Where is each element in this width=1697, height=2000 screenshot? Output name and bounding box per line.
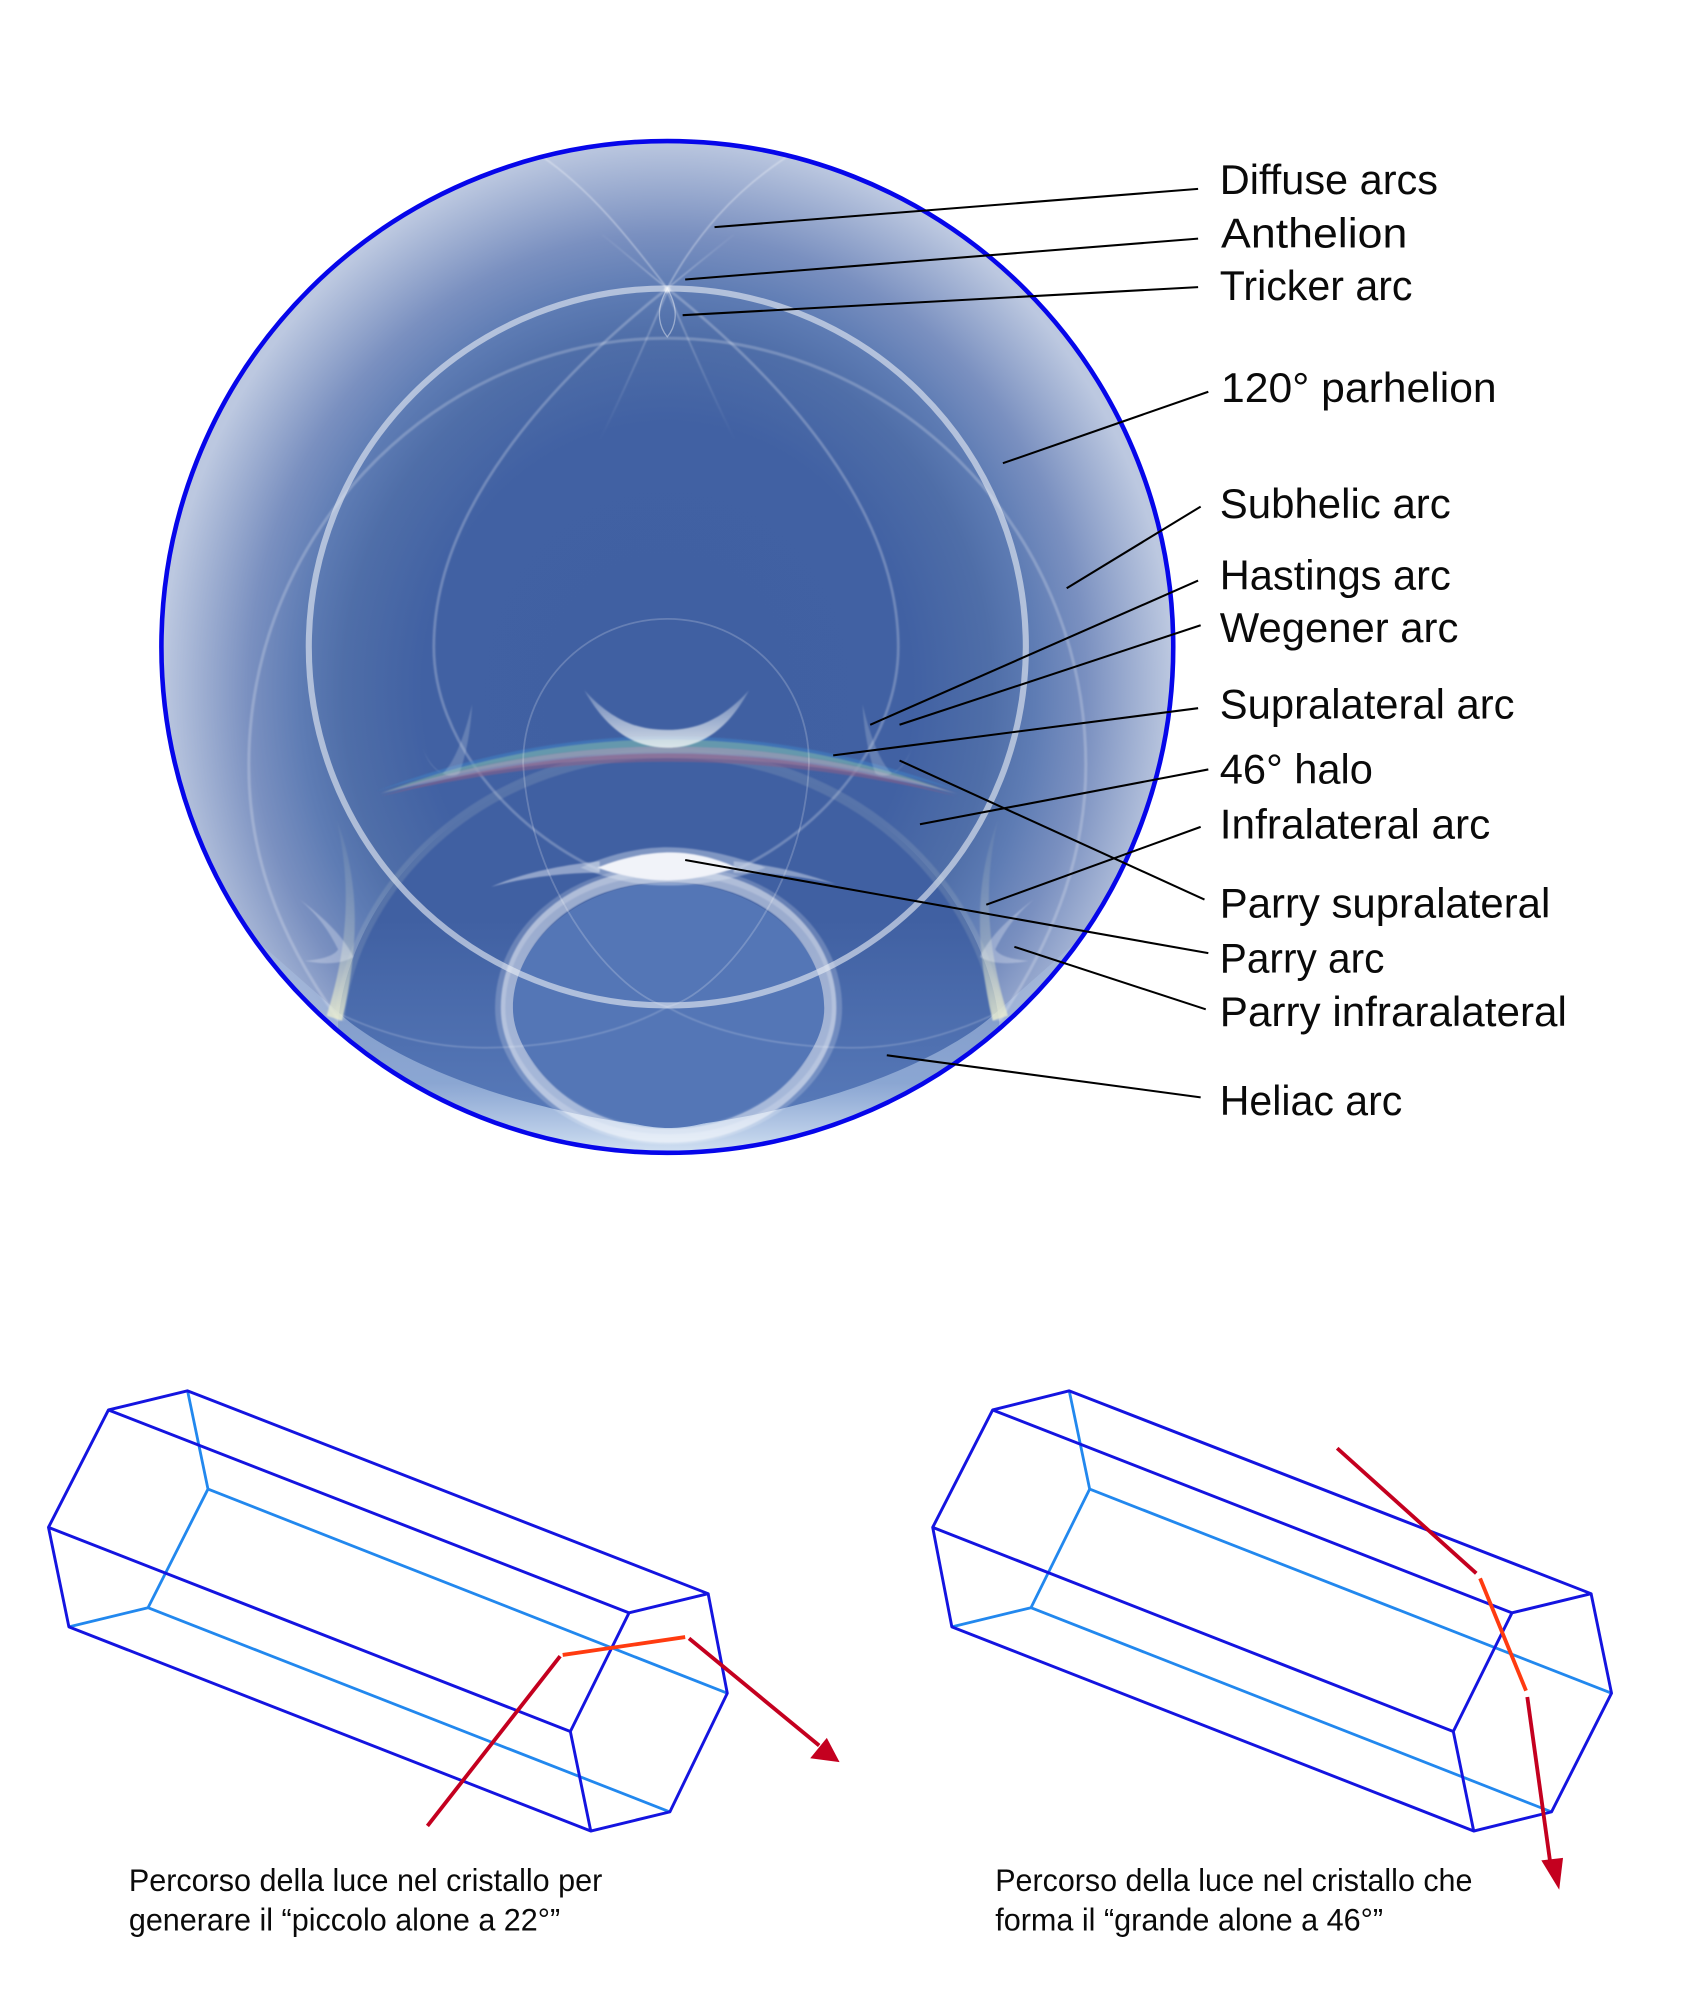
leader: Supralateral arc	[833, 708, 1198, 755]
halo display disc	[161, 140, 1174, 1174]
disc outline	[161, 141, 1173, 1153]
label: Anthelion: Anthelion	[1221, 210, 1407, 257]
sky background	[164, 143, 1171, 1028]
leader: Subhelic arc	[1067, 507, 1201, 588]
label: Subhelic arc: Subhelic arc	[1220, 480, 1451, 527]
infralateral arcs	[327, 820, 1008, 1021]
leader: Heliac arc	[887, 1055, 1201, 1097]
leader: Parry arc	[685, 860, 1208, 953]
leader: Wegener arc	[900, 625, 1201, 725]
subhelic arcs converging at the top	[434, 288, 898, 870]
leader lines	[683, 189, 1208, 1097]
Hastings and Wegener side arcs	[421, 704, 914, 776]
leader: Parry infralateral	[1014, 947, 1206, 1009]
arrowhead	[810, 1738, 840, 1762]
large 120 degree arc	[249, 338, 1086, 1021]
label: Supralateral arc: Supralateral arc	[1220, 680, 1515, 727]
upper tangent crescent	[584, 690, 749, 748]
leader: Hastings arc	[870, 581, 1198, 725]
label: Parry supralateral: Parry supralateral	[1220, 879, 1550, 926]
label: Infralateral arc: Infralateral arc	[1220, 800, 1490, 847]
lower thin sweeps	[341, 1007, 994, 1048]
incoming ray	[1337, 1448, 1476, 1573]
diffuse arcs	[541, 156, 789, 288]
outgoing ray	[1527, 1697, 1550, 1863]
crystal diagram: 22 degree halo	[48, 1391, 840, 1831]
caption: 22 degree halo	[129, 1863, 602, 1938]
outgoing ray	[689, 1638, 819, 1746]
label: Parry arc: Parry arc	[1220, 934, 1384, 981]
hidden crystal edges	[69, 1391, 727, 1812]
caption: 22 degree halo: generare il “piccolo alone a 22°”	[129, 1903, 560, 1938]
labels	[1220, 156, 1567, 1124]
caption: 22 degree halo: Percorso della luce nel cristallo per	[129, 1863, 602, 1898]
internal ray	[563, 1637, 685, 1655]
leader: Anthelion	[685, 239, 1198, 279]
arrowhead	[1541, 1858, 1563, 1890]
hidden crystal edges	[952, 1391, 1612, 1812]
22 degree halo ring	[500, 870, 837, 1139]
crystal diagram: 46 degree halo	[933, 1391, 1612, 1890]
label: Wegener arc: Wegener arc	[1220, 604, 1458, 651]
label: Parry infraralateral: Parry infraralateral	[1220, 988, 1567, 1035]
Parry infralateral hooks	[300, 900, 1034, 963]
Tricker arc lens	[659, 288, 675, 337]
Parry arc	[491, 847, 836, 887]
leader: Tricker arc	[683, 287, 1198, 315]
46 degree halo ring	[339, 753, 999, 1021]
anthelion	[664, 286, 671, 293]
leader: Parry supralateral	[900, 761, 1204, 900]
label: Diffuse arcs: Diffuse arcs	[1220, 156, 1438, 203]
inner teardrop circle	[523, 619, 809, 1007]
incoming ray	[427, 1656, 560, 1826]
internal ray	[1480, 1578, 1526, 1691]
heliac arc band	[270, 952, 1064, 1150]
caption: 46 degree halo: Percorso della luce nel cristallo che	[995, 1863, 1472, 1898]
lower dome inside 46 degree halo	[338, 855, 999, 1124]
label: 46 halo: 46° halo	[1220, 745, 1373, 792]
front crystal edges	[48, 1391, 727, 1831]
label: 120 parhelion: 120° parhelion	[1221, 364, 1497, 411]
label: Hastings arc: Hastings arc	[1220, 552, 1451, 599]
front crystal edges	[933, 1391, 1612, 1831]
leader: Diffuse arcs	[715, 189, 1198, 227]
leader: 120 parhelion	[1003, 392, 1208, 463]
caption: 46 degree halo: forma il “grande alone a 46°”	[995, 1903, 1383, 1938]
label: Heliac arc: Heliac arc	[1220, 1077, 1402, 1124]
leader: Infralateral arc	[986, 827, 1201, 905]
supralateral rainbow arc	[376, 736, 960, 796]
caption: 46 degree halo	[995, 1863, 1472, 1938]
parhelic circle	[309, 288, 1026, 1005]
label: Tricker arc: Tricker arc	[1220, 262, 1412, 309]
leader: 46 halo	[920, 769, 1208, 824]
